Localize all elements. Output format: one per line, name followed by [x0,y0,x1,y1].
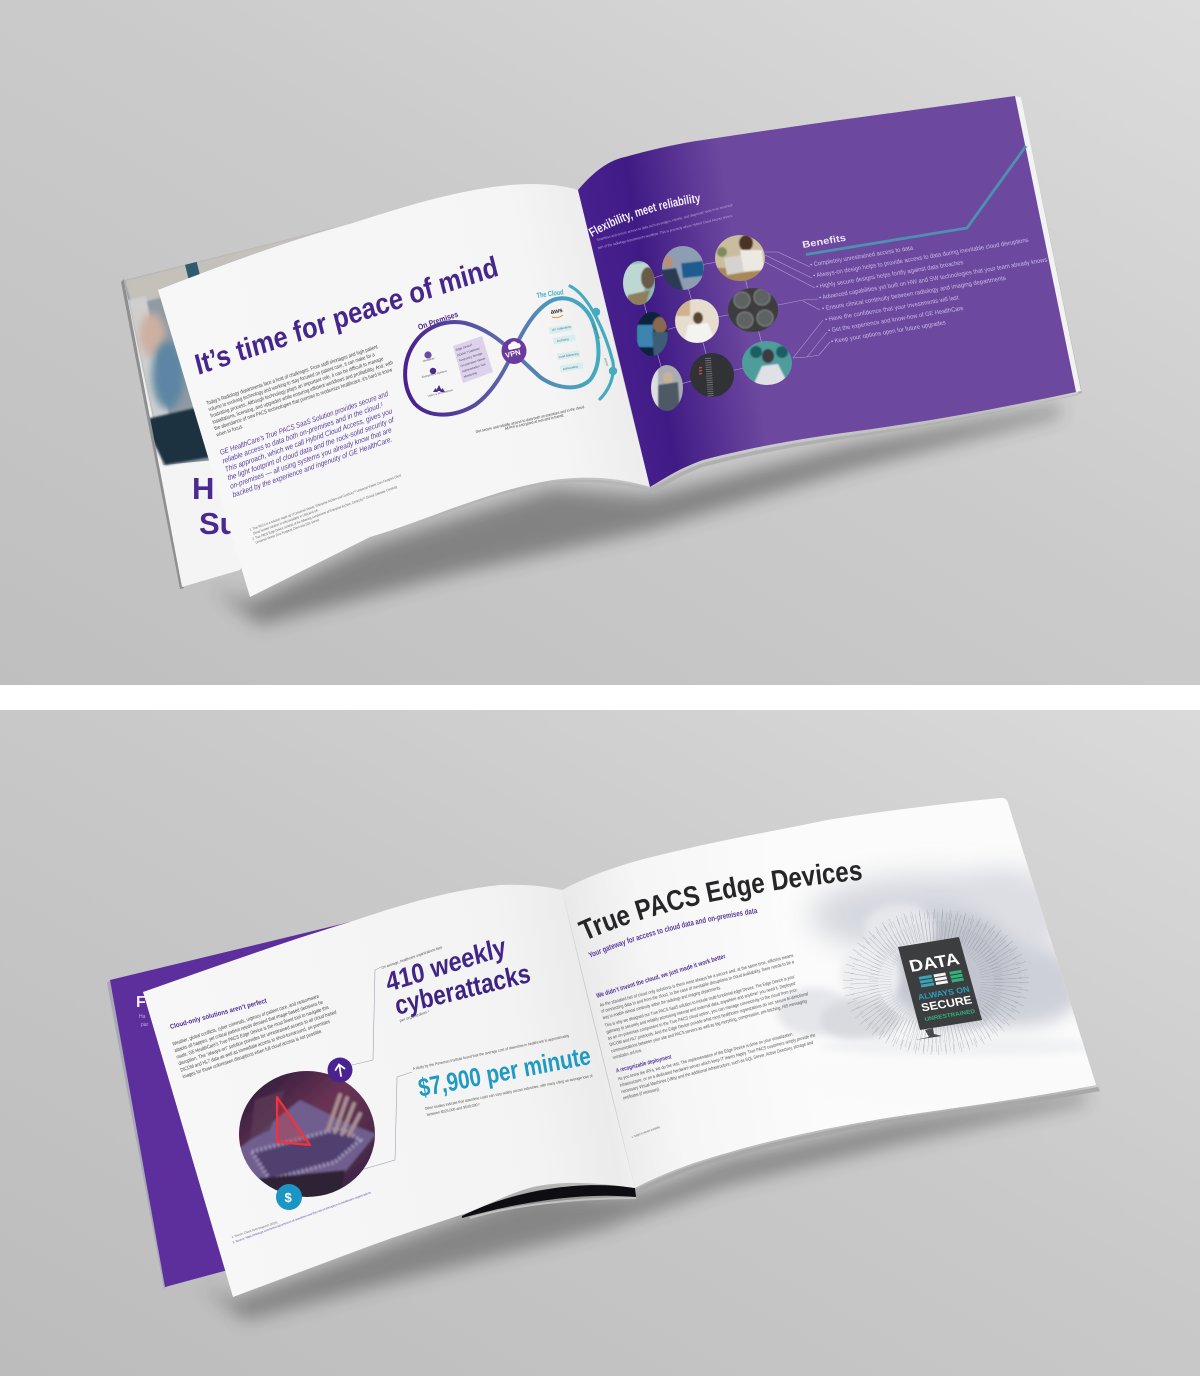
cloud service tags [549,324,583,372]
icon: dollar badge [276,1184,302,1210]
italic solution statement [219,389,402,499]
back cover fragments: F [136,994,146,1011]
body text: As the standard bet of cloud only solutions is them most always be a secure and, at the same time, efficient means [599,953,794,1008]
photo circle: woman with laptop [714,234,766,282]
cloud service tags: Archiving [556,337,569,343]
benefits list: • Get the experience and know-how of GE HealthCare [827,305,965,334]
body text: way to enable clinical continuity within the radiology and imaging departments. [602,985,721,1020]
data sign: ALWAYS ON [917,984,971,1002]
intro text: part of the radiology department’s workflow. This is precisely where Hybrid Cloud Access shines. [597,214,733,250]
heading: True PACS Edge Devices [577,864,862,939]
edge device list: Edge Device² [455,343,473,352]
italic solution statement: This approach, which we call Hybrid Cloud Access, gives you [224,406,394,474]
back cover heading fragments: H [192,471,214,506]
body text [599,952,822,1101]
cloud service tags: Autoscaling [562,364,578,371]
cast shadow: bottom brochure [200,1092,1085,1320]
back cover page: par [141,1022,149,1028]
benefits list: • Ensure clinical continuity between radiology and imaging departments [821,275,1007,312]
top photo backdrop [0,0,1200,685]
stat: 410 weekly: 410 weekly [383,931,509,998]
section heading: We didn’t invent the cloud, we just made it work better [596,953,727,1000]
stat: cyberattacks: cyberattacks [392,958,533,1021]
right page: flexibility, meet reliability [578,96,1076,487]
photo circle: dark data list [690,353,734,397]
icon: arrow badge [328,1058,352,1082]
right page: true PACS edge devices [562,798,1096,1188]
right page edge layers [635,1087,1100,1194]
body text: gateway to securely and reliably accessing internal and external data, anywhere and anytime¹ you need it. Deployed [606,981,796,1034]
edge device list: On-premises Viewer [460,356,486,368]
benefits list: • Keep your options open for future upgrades [830,319,947,345]
left page: peace of mind [158,184,650,597]
stat note: between $325,000 and $540,000.² [426,1101,481,1117]
diagram caption: Get secure and reliable access to data both on-premises and in the cloud. [475,404,585,434]
on-prem icons: Enterprise & Systems [421,369,448,379]
data sign: DATA [907,949,961,976]
benefits list: • Completely unrestrained access to data [809,245,914,269]
benefits list [809,224,1060,345]
data sign: UNRESTRAINED [924,1009,976,1023]
top brochure [121,96,1082,632]
footnotes: 1. Source: Check Point Research (2024) [231,1220,278,1239]
heading: Flexibility, meet reliability [588,194,700,237]
benefits heading: Benefits [801,233,847,251]
benefits list: • Advanced capabilities yet built on HW and SW technologies that your team already knows [818,257,1048,302]
back cover page [107,922,400,1289]
benefits list: • Have the confidence that your investments will last [824,294,960,323]
footnotes: 2. Source: https://www.ge.com/news/reports/cost-of-downtime-and-the-risk-of-disruption-in-healthcare-organizations [232,1190,372,1244]
body text: As you know the IRFs, we do the rest. The implementation of the Edge Device is done on your virtualization [617,1031,793,1081]
aws logo: aws [550,307,564,316]
body paragraph: disruption. The “always-on” solution provides for unrestrained access to all cloud based [178,1010,337,1067]
label: the cloud: The Cloud [536,287,564,300]
bottom brochure [107,798,1100,1327]
edge device list [453,336,493,383]
title: It’s time for peace of mind [192,251,502,382]
footnotes: 1. True PACS is a solution made up of Universal Viewer, Enterprise Archive and Centricity™ Universal Viewer Zero Footprint Client [249,473,402,532]
connector lines [350,967,412,1173]
body text: DICOM and HL7 protocols. And the Edge Device provide what most healthcare organizations do not: secure bi-directional [609,991,809,1047]
data sign [898,937,982,1040]
body paragraph: Weather, global conflicts, cyber criminals, urgency of patient care, and ransomware [172,994,320,1048]
body text: certificates (if necessary). [622,1086,660,1101]
body paragraph: made. GE HealthCare’s True PACS Edge Device is the most finest tool to navigate this [176,1005,330,1061]
edge device list: UDI/HL7 Gateway [457,346,481,357]
photo circle: monitor review [662,246,704,290]
on-prem icons [421,351,454,398]
intro paragraph: installations, licensing, and upgrades while ensuring efficient workflows and profitability. And, with [212,360,394,426]
cloud image [777,870,1120,1106]
stat: $7,900 per minute: $7,900 per minute [416,1040,593,1103]
icon: dollar badge: $ [284,1190,292,1205]
laptop alert photo [239,1071,375,1197]
benefits list: • Always-on design helps to provide access to data during inevitable cloud disruptions [812,237,1029,280]
right page edge layers [650,96,1082,494]
edge device list: Monitoring [463,371,478,379]
edge device list: Administration Tool [462,362,486,373]
VPN hub: VPN [504,347,521,360]
photo circle: clinician teal [623,261,655,305]
back cover page: Ha [139,1014,146,1020]
photo circle: dark scans viewer [636,312,668,356]
intro text: Seamless and secure access to data such as images, reports, and diagnostic tools is an essential [596,203,733,242]
cloud service tags: UI / Collections [551,325,572,332]
benefits list: • Highly secure designs helps fortify against data breaches [815,259,964,291]
arc nodes: Hybrid Cloud [591,323,602,339]
on-prem icons: Modalities [422,356,436,363]
data sign: SECURE [920,995,974,1014]
italic solution statement: the light footprint of cloud data and the rock-solid security of [226,415,396,482]
arc nodes: Always [603,357,610,367]
footnote: 1. Subject to network availability [631,1125,661,1139]
VPN hub [502,338,526,364]
body text: of connecting data to and from the cloud. In the case of inevitable disruptions to cloud availability, there needs to be a [601,959,795,1014]
intro paragraph: the abundance of new PACS technologies that promise to modernize healthcare, it’s hard to know [214,367,393,432]
body text: as an on-premises component to the True PACS cloud option, you can manage connectivity to the cloud from your [607,987,798,1041]
back cover page [121,224,348,589]
on-prem icons: Users & Workstations [427,388,454,398]
subheading: Cloud-only solutions aren’t perfect [169,998,268,1031]
photo circle: brain scans [727,287,779,333]
subheading: Your gateway for access to cloud data and on-premises data [588,908,758,958]
body text: necessary Virtual Machines (VMs) and the additional infrastructure, such as SQL Server, Active Directory, storage and [621,1040,814,1094]
body paragraph [172,990,341,1080]
arc nodes [591,308,617,375]
footnotes: Universal Viewer Zero Footprint Client and SQL Server. [255,518,320,545]
intro paragraph: frustrating process. Although technology plays an important role, it can be difficult to manage [210,356,384,420]
footnotes: Cloud hosted solution is only available in USA and UK. [252,508,319,536]
stat note: Other studies indicate that downtime costs can vary widely across industries, with many citing an average loss of [424,1073,594,1111]
back cover page: Su [199,506,239,541]
intro paragraph: when to focus. [215,424,244,439]
intro paragraph: volume to evolving technology and working to stay focused on patient care, it can make for a [208,352,376,413]
body text: communications between your site and PACS servers as well as tag morphing, compression, pre-fetching, HIS messaging [611,998,808,1054]
body text: normalization, and more. [612,1048,642,1060]
body text: This is why we designed our True PACS SaaS solution to include multi-functional edge Device. The Edge Device is your [604,974,795,1028]
spine sheet layers [470,1198,636,1218]
cloud service tags: Load Balancing [558,352,579,359]
edge device list: Temporary Storage [458,351,483,363]
left page: cyberattacks [143,885,635,1297]
back cover photo [124,220,360,465]
spine dark gap [462,1185,636,1218]
connector lines [639,252,830,388]
left page sheet layers [400,481,650,530]
bottom photo backdrop [0,710,1200,1376]
italic solution statement: backed by the experience and ingenuity of GE HealthCare. [231,434,393,499]
outer cloud arc [570,286,613,399]
photo circle: doctor at desk [674,298,720,344]
body text: infrastructure, or on a dedicated hardware server which keep IT teams happy. True PACS customers simply provide the [619,1032,816,1088]
infinity diagram: on premises and the cloud [405,286,617,434]
data burst rays [848,914,1024,1050]
stat label: attacks: On average, healthcare organizations face [381,944,443,970]
cast shadow: top brochure [215,405,1060,625]
body paragraph: images for those unforeseen disruptions when full cloud access is not possible. [182,1029,323,1080]
deployment heading: A recognizable deployment [616,1055,672,1075]
italic solution statement: GE HealthCare’s True PACS SaaS Solution provides secure and [219,389,390,457]
photo circle: teal monitor radiologist [742,341,792,385]
footnotes: 2. True PACS Edge Device consists of the following components of Enterprise Archive, Centricity™ Clinical Gateway, Centricity [252,485,398,541]
label: on premises: On Premises [417,310,460,332]
stat note: per organization.¹ [399,1008,430,1023]
stat label: downtime: A study by the Ponemon Institute found that the average cost of downtime in healthcare is approximately [412,1033,570,1071]
intro paragraph: Today’s Radiology departments face a host of challenges. From staff shortages and high patient [206,344,379,407]
photo circle: seated clinician [650,364,684,412]
body paragraph: DICOM and HL7 data as well as immediate access to short-turnaround, on-premises [180,1019,331,1074]
icon: database stacks [919,970,964,987]
intro paragraph [205,341,398,439]
teal growth line [806,146,1026,254]
diagram caption: All PHI is encrypted at rest and in transit. [504,412,565,431]
italic solution statement: on-premises — all using systems you already know that are [229,425,393,491]
italic solution statement: reliable access to data both on-premises and in the cloud.¹ [221,400,385,465]
body paragraph: attacks all happen, yet critical patient needs demand that image-based decisions be [174,1000,324,1054]
